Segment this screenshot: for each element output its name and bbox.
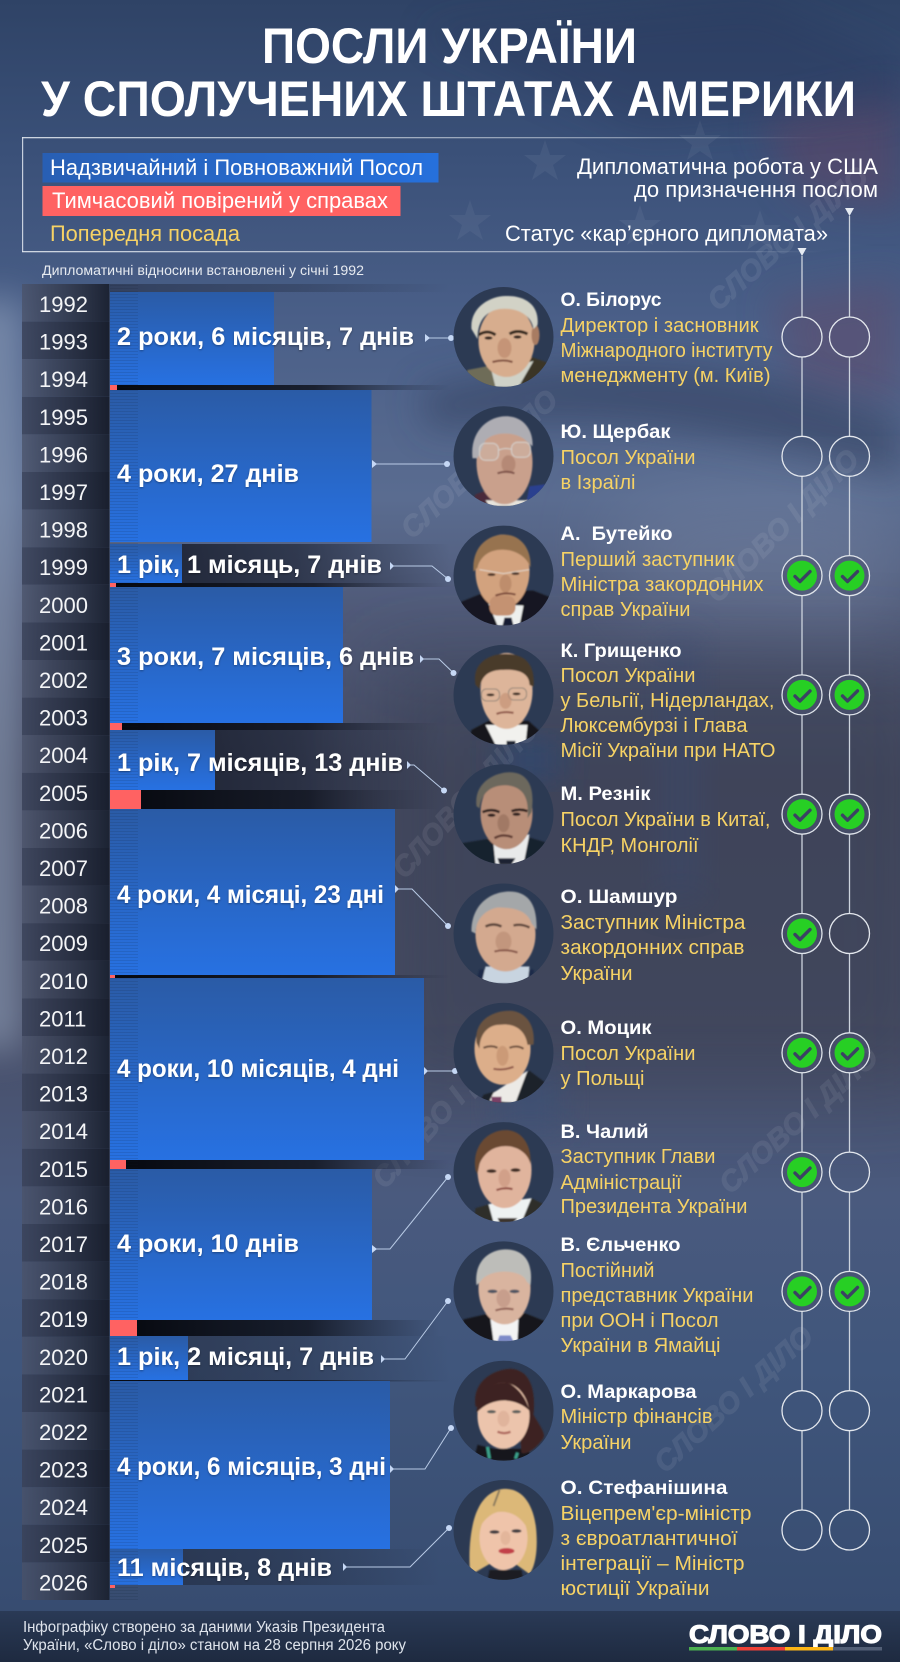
person text: Щербак: в Ізраїлі xyxy=(560,472,636,494)
year axis: 2015 xyxy=(39,1157,88,1182)
person text: Шамшур: закордонних справ xyxy=(560,937,744,959)
person text: Чалий: В. Чалий xyxy=(560,1122,648,1143)
person text: Щербак xyxy=(560,422,696,494)
person text: Грищенко: Місії України при НАТО xyxy=(560,740,776,762)
year axis: 2014 xyxy=(39,1119,88,1144)
portrait: Грищенко xyxy=(454,645,554,745)
bar: Шамшур xyxy=(110,809,395,975)
person text: Єльченко: України в Ямайці xyxy=(560,1335,720,1357)
person text: Білорус: Міжнародного інституту xyxy=(560,340,772,362)
column heading: career diplomat status: Статус «кар’єрного дипломата» xyxy=(505,221,828,246)
year axis: 2026 xyxy=(39,1570,88,1595)
year axis: 2005 xyxy=(39,781,88,806)
person text: Бутейко: Перший заступник xyxy=(560,549,735,571)
year axis: 1992 xyxy=(39,292,88,317)
year axis xyxy=(22,284,110,1600)
year axis: 2023 xyxy=(39,1458,88,1483)
person text: Шамшур: України xyxy=(560,963,632,985)
tenure bars xyxy=(110,284,450,1600)
person text: Щербак: Ю. Щербак xyxy=(560,422,671,443)
tenure labels: 1 рік, 1 місяць, 7 днів xyxy=(117,551,382,579)
stripe texture xyxy=(110,284,138,1600)
connectors xyxy=(343,334,458,1571)
tenure labels: 4 роки, 4 місяці, 23 дні xyxy=(117,881,384,909)
watermarks: СЛОВО І ДІЛО xyxy=(700,443,866,609)
portrait: Єльченко xyxy=(454,1241,554,1341)
portrait: Шамшур xyxy=(454,884,554,984)
tenure labels xyxy=(117,323,414,1582)
watermarks: СЛОВО І ДІЛО xyxy=(702,160,875,317)
portrait: Чалий xyxy=(454,1122,554,1222)
year axis: 1998 xyxy=(39,518,88,543)
year axis: 1994 xyxy=(39,367,88,392)
person text: Стефанішина xyxy=(560,1478,752,1600)
person text: Стефанішина: інтеграції – Міністр xyxy=(560,1553,744,1575)
person text: Стефанішина: з євроатлантичної xyxy=(560,1528,738,1550)
person text: Резнік xyxy=(560,784,770,857)
bar: Моцик xyxy=(110,978,424,1160)
person text: Бутейко: А. Бутейко xyxy=(560,524,672,545)
year axis: 2013 xyxy=(39,1082,88,1107)
year axis: 2010 xyxy=(39,969,88,994)
person text: Щербак: Посол України xyxy=(560,447,696,469)
person text: Грищенко: у Бельгії, Нідерландах, xyxy=(560,690,774,712)
year axis: 2011 xyxy=(39,1006,86,1031)
year axis: 2022 xyxy=(39,1420,88,1445)
bar: Маркарова xyxy=(110,1381,390,1549)
bar: Резнік xyxy=(110,730,215,790)
person text: Шамшур xyxy=(560,887,746,985)
charge d'affaires periods xyxy=(110,385,141,1588)
vertical lines xyxy=(802,216,850,1510)
tenure labels: 2 роки, 6 місяців, 7 днів xyxy=(117,323,414,351)
person text: Грищенко: Посол України xyxy=(560,665,696,687)
legend panel xyxy=(22,137,878,252)
bar: Грищенко xyxy=(110,587,343,723)
year axis: 1996 xyxy=(39,442,88,467)
bar: Чалий xyxy=(110,1169,372,1320)
person text: Грищенко xyxy=(560,641,776,762)
column heading: diplomatic work in USA: Дипломатична робота у США xyxy=(577,154,878,179)
person text: Грищенко: Люксембурзі і Глава xyxy=(560,715,748,737)
dark row bands xyxy=(110,284,450,1585)
empty status circles xyxy=(782,317,870,1550)
person text: Білорус: менеджменту (м. Київ) xyxy=(560,365,770,387)
tenure labels: 11 місяців, 8 днів xyxy=(117,1554,332,1582)
watermarks: СЛОВО І ДІЛО xyxy=(713,1041,885,1200)
person text: Бутейко: справ України xyxy=(560,599,690,621)
year axis: 2000 xyxy=(39,593,88,618)
person text: Єльченко: Постійний xyxy=(560,1260,654,1282)
note: relations established: Дипломатичні відносини встановлені у січні 1992 xyxy=(42,263,364,278)
arrows xyxy=(798,208,854,256)
person text: Бутейко: Міністра закордонних xyxy=(560,574,764,596)
footer band xyxy=(0,1611,900,1662)
portrait: Моцик xyxy=(454,1003,554,1103)
bar: Щербак xyxy=(110,390,372,542)
tenure labels: 1 рік, 7 місяців, 13 днів xyxy=(117,749,403,777)
title: У СПОЛУЧЕНИХ ШТАТАХ АМЕРИКИ xyxy=(41,71,856,127)
person text: Стефанішина: Віцепрем'єр-міністр xyxy=(560,1503,752,1525)
year axis: 2004 xyxy=(39,743,88,768)
tenure labels: 4 роки, 10 місяців, 4 дні xyxy=(117,1055,399,1083)
year axis: 2020 xyxy=(39,1345,88,1370)
portrait: Маркарова xyxy=(454,1361,554,1461)
watermarks: СЛОВО І ДІЛО xyxy=(366,1023,526,1195)
person text: Моцик: Посол України xyxy=(560,1043,696,1065)
watermarks: СЛОВО І ДІЛО xyxy=(395,384,565,545)
title: ПОСЛИ УКРАЇНИ xyxy=(262,18,637,74)
check marks xyxy=(782,556,870,1311)
person text: Єльченко: при ООН і Посол xyxy=(560,1310,718,1332)
person text: Білорус: О. Білорус xyxy=(560,290,662,311)
person text: Стефанішина: юстиції України xyxy=(560,1578,710,1600)
source note: Інфографіку створено за даними Указів Президента xyxy=(23,1619,385,1636)
person text: Грищенко: К. Грищенко xyxy=(560,641,682,662)
year axis: 2024 xyxy=(39,1495,88,1520)
title xyxy=(41,18,856,127)
person text: Єльченко xyxy=(560,1235,754,1357)
legend: previous position: Попередня посада xyxy=(50,221,241,246)
year axis: 2018 xyxy=(39,1270,88,1295)
year axis: 2019 xyxy=(39,1307,88,1332)
person text: Білорус xyxy=(560,290,772,387)
tenure labels: 4 роки, 6 місяців, 3 дні xyxy=(117,1453,386,1481)
person text: Маркарова: О. Маркарова xyxy=(560,1382,697,1403)
person text: Резнік: М. Резнік xyxy=(560,784,651,805)
legend: ambassador: Надзвичайний і Повноважний Посол xyxy=(50,155,423,180)
person text: Бутейко xyxy=(560,524,764,621)
year axis: 2016 xyxy=(39,1194,88,1219)
person text: Чалий: Президента України xyxy=(560,1196,748,1218)
logo: СЛОВО І ДІЛО xyxy=(689,1621,882,1649)
year axis: 2008 xyxy=(39,894,88,919)
person text: Чалий xyxy=(560,1122,748,1218)
bar: Білорус xyxy=(110,292,274,385)
tenure labels: 1 рік, 2 місяці, 7 днів xyxy=(117,1343,374,1371)
year axis: 2001 xyxy=(39,630,88,655)
watermarks xyxy=(366,160,885,1479)
person text: Моцик: у Польщі xyxy=(560,1068,644,1090)
person text: Єльченко: В. Єльченко xyxy=(560,1235,680,1256)
person text: Єльченко: представник України xyxy=(560,1285,754,1307)
person text: Стефанішина: О. Стефанішина xyxy=(560,1478,728,1499)
person text: Моцик: О. Моцик xyxy=(560,1018,652,1039)
portrait: Стефанішина xyxy=(454,1480,554,1580)
legend: charge d'affaires: Тимчасовий повірений у справах xyxy=(52,188,388,213)
portrait: Білорус xyxy=(454,287,554,387)
year axis: 1999 xyxy=(39,555,88,580)
column heading: diplomatic work in USA xyxy=(577,154,878,202)
year axis: 1993 xyxy=(39,330,88,355)
status timelines xyxy=(782,208,870,1550)
year axis: 2017 xyxy=(39,1232,88,1257)
portrait: Резнік xyxy=(454,764,554,864)
portrait: Бутейко xyxy=(454,526,554,626)
source note: України, «Слово і діло» станом на 28 серпня 2026 року xyxy=(23,1637,406,1654)
person text: Моцик xyxy=(560,1018,696,1090)
portrait: Щербак xyxy=(454,406,554,506)
person text: Резнік: КНДР, Монголії xyxy=(560,835,699,857)
year axis: 1997 xyxy=(39,480,88,505)
tenure labels: 4 роки, 27 днів xyxy=(117,460,299,488)
person text: Чалий: Заступник Глави xyxy=(560,1146,716,1168)
person text: Чалий: Адміністрації xyxy=(560,1172,682,1194)
bar: Єльченко xyxy=(110,1336,188,1380)
bar: Стефанішина xyxy=(110,1549,183,1585)
person text: Маркарова: Міністр фінансів xyxy=(560,1406,712,1428)
person text: Шамшур: О. Шамшур xyxy=(560,887,678,908)
bar: Бутейко xyxy=(110,544,182,583)
year axis: 2025 xyxy=(39,1533,88,1558)
person text: Резнік: Посол України в Китаї, xyxy=(560,809,770,831)
year axis: 2021 xyxy=(39,1382,88,1407)
person text: Маркарова xyxy=(560,1382,712,1454)
year axis: 2007 xyxy=(39,856,88,881)
year axis: 1995 xyxy=(39,405,88,430)
person text: Маркарова: України xyxy=(560,1432,632,1454)
tenure labels: 4 роки, 10 днів xyxy=(117,1230,299,1258)
watermarks: СЛОВО І ДІЛО xyxy=(386,713,546,885)
column heading: diplomatic work in USA: до призначення послом xyxy=(634,177,878,202)
tenure labels: 3 роки, 7 місяців, 6 днів xyxy=(117,643,414,671)
watermarks: СЛОВО І ДІЛО xyxy=(648,1320,820,1479)
year axis: 2002 xyxy=(39,668,88,693)
person text: Білорус: Директор і засновник xyxy=(560,315,759,337)
year axis: 2009 xyxy=(39,931,88,956)
year axis: 2003 xyxy=(39,706,88,731)
year axis: 2006 xyxy=(39,818,88,843)
person text: Шамшур: Заступник Міністра xyxy=(560,912,746,934)
year axis: 2012 xyxy=(39,1044,88,1069)
source note xyxy=(23,1619,406,1654)
